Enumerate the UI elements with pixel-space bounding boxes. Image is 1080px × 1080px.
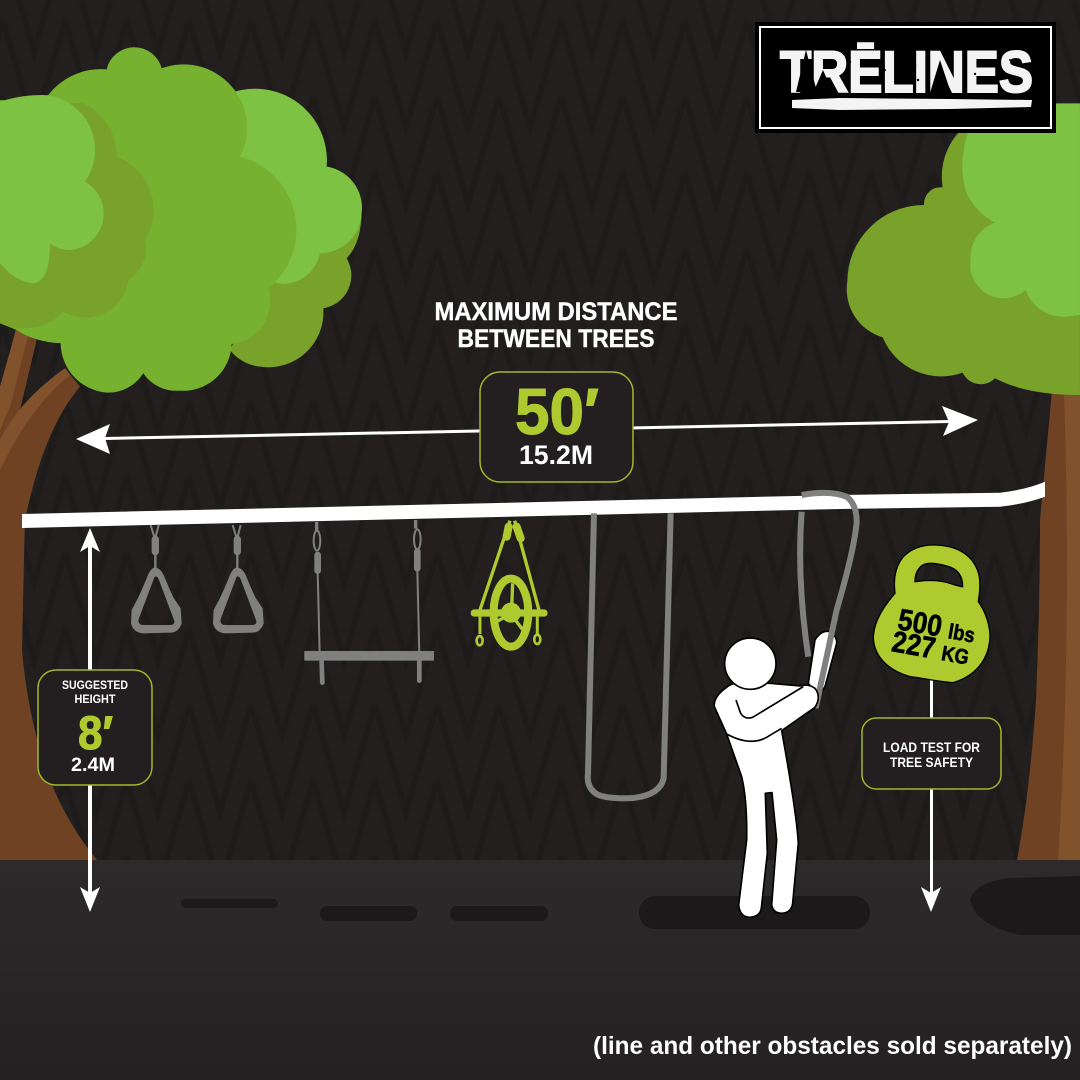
heading: BETWEEN TREES xyxy=(458,325,654,353)
gymnastic rings xyxy=(131,525,264,633)
body xyxy=(714,683,818,917)
kettlebell weight: 227 KG xyxy=(889,625,972,671)
distance callout: 15.2M xyxy=(519,440,593,470)
arm creases xyxy=(727,687,803,741)
head xyxy=(725,638,776,689)
light back foliage xyxy=(230,89,362,284)
heading xyxy=(434,298,678,353)
heading: MAXIMUM DISTANCE xyxy=(434,298,678,326)
logo tree icons xyxy=(796,50,951,93)
logo speckles xyxy=(839,59,1021,106)
wheel obstacle xyxy=(474,521,544,647)
olive foliage xyxy=(847,110,1080,395)
left tree trunk xyxy=(0,328,97,860)
person xyxy=(714,493,857,917)
chevron background xyxy=(0,0,1080,860)
suggested height callout xyxy=(38,670,152,785)
distance callout: 50′ xyxy=(515,375,599,448)
left tree canopy xyxy=(0,47,362,393)
swing and strap xyxy=(588,512,808,798)
load test callout: TREE SAFETY xyxy=(890,754,974,770)
main foliage xyxy=(0,47,296,393)
logo log underline xyxy=(792,98,1032,110)
ring left xyxy=(131,525,182,633)
distance callout xyxy=(480,372,633,482)
suggested height callout: SUGGESTED xyxy=(62,680,128,692)
olive back foliage xyxy=(230,213,362,367)
zip line xyxy=(22,482,1045,528)
logo wordmark: TRĒLINES xyxy=(780,40,1033,105)
suggested height callout: 2.4M xyxy=(71,754,115,776)
light foliage xyxy=(962,103,1080,317)
strap back side xyxy=(800,512,808,657)
trapeze bar xyxy=(304,520,434,683)
kettlebell weight: 500 lbs xyxy=(895,603,978,649)
right tree trunk xyxy=(1017,390,1080,860)
ring right xyxy=(213,525,264,633)
suggested height arrow xyxy=(80,528,100,912)
load test callout: LOAD TEST FOR xyxy=(883,739,980,755)
olive inner lobe xyxy=(0,100,154,328)
seat swing xyxy=(588,513,671,798)
logo xyxy=(755,22,1056,133)
kettlebell weight xyxy=(873,545,990,683)
load test callout xyxy=(862,718,1001,789)
ground xyxy=(0,860,1080,1080)
strap front side xyxy=(802,493,857,708)
horizontal distance arrow xyxy=(76,406,978,454)
ground shadows xyxy=(181,876,1080,935)
footnote: (line and other obstacles sold separately) xyxy=(593,1032,1072,1060)
hand grip xyxy=(808,631,837,697)
load test arrow xyxy=(921,680,941,912)
suggested height callout: 8′ xyxy=(78,706,113,759)
suggested height callout: HEIGHT xyxy=(74,694,116,706)
right tree canopy xyxy=(847,103,1080,395)
light left lobe xyxy=(0,95,104,283)
